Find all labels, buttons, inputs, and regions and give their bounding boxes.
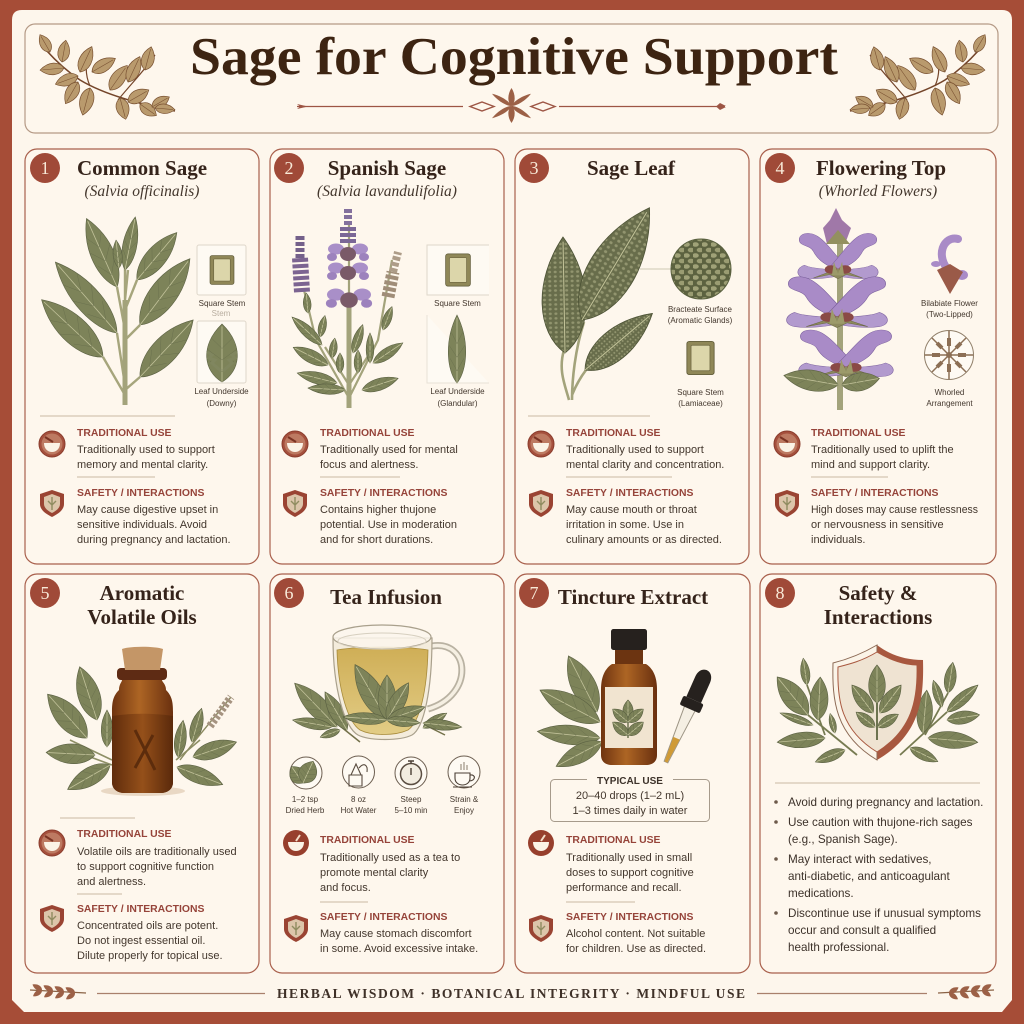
- safety: SAFETY / INTERACTIONS: [566, 912, 693, 923]
- callout: bracteate surface: (Aromatic Glands): [668, 316, 733, 325]
- panel: 1 Common Sage: [25, 149, 259, 564]
- illustration: tincture bottle and dropper: [535, 629, 717, 774]
- heading: Common Sage: [77, 156, 207, 180]
- upper right flower spike: [393, 252, 398, 272]
- illustration: whorled flower stalk: [782, 208, 893, 410]
- traditional use: focus and alertness.: [320, 459, 418, 471]
- footer tagline: HERBAL WISDOM · BOTANICAL INTEGRITY · MINDFUL USE: [277, 986, 745, 1001]
- upper left flower spike: [296, 234, 304, 258]
- step: steep timer: Steep: [401, 795, 422, 804]
- safety: May cause mouth or throat: [566, 504, 697, 516]
- icon: right botanical sprig: [850, 32, 990, 121]
- traditional use: TRADITIONAL USE: [320, 428, 415, 439]
- safety: culinary amounts or as directed.: [566, 534, 722, 546]
- traditional use: TRADITIONAL USE: [320, 835, 415, 846]
- heading: [87, 581, 197, 629]
- callout: bracteate surface: [640, 239, 733, 325]
- callout: bilabiate flower: Bilabiate Flower: [921, 299, 978, 308]
- number badge 4: 4: [776, 158, 784, 178]
- safety: during pregnancy and lactation.: [77, 534, 230, 546]
- icon: footer right sprig: [938, 982, 994, 1001]
- safety list: (e.g., Spanish Sage).: [788, 833, 898, 846]
- safety: SAFETY / INTERACTIONS: [77, 904, 204, 915]
- safety: Dilute properly for topical use.: [77, 950, 223, 962]
- callout: whorled arrangement: [924, 330, 974, 408]
- safety: [40, 904, 223, 962]
- callout: typical use: 20–40 drops (1–2 mL): [576, 790, 684, 802]
- safety: [529, 912, 706, 955]
- traditional use: Traditionally used to support: [77, 444, 215, 456]
- footer: [30, 982, 994, 1001]
- number badge 1: 1: [40, 158, 50, 178]
- step: hot water: 8 oz: [351, 795, 366, 804]
- top flower spike: [340, 225, 356, 243]
- heading: Interactions: [824, 605, 932, 629]
- safety: potential. Use in moderation: [320, 519, 457, 531]
- callout: leaf underside: Leaf Underside: [194, 387, 249, 396]
- traditional use: TRADITIONAL USE: [566, 835, 661, 846]
- traditional use: [528, 428, 724, 471]
- safety list: Avoid during pregnancy and lactation.: [788, 796, 983, 809]
- step: dried herb: [285, 757, 325, 815]
- traditional use: mind and support clarity.: [811, 459, 930, 471]
- callout: square stem: Square Stem: [434, 299, 481, 308]
- safety: or nervousness in sensitive: [811, 519, 944, 531]
- traditional use: Traditionally used to uplift the: [811, 444, 954, 456]
- heading: Spanish Sage: [328, 156, 446, 180]
- step: steep timer: 5–10 min: [395, 806, 427, 815]
- illustration: sage leaves: [541, 196, 670, 400]
- panel: 8 Safety and Interactions: [760, 574, 996, 973]
- number badge 1: [30, 153, 60, 183]
- callout: square stem: Square Stem: [199, 299, 246, 308]
- safety: High doses may cause restlessness: [811, 504, 978, 516]
- callout: square stem: Stem: [212, 309, 231, 318]
- step: hot water: Hot Water: [341, 806, 377, 815]
- callout: bilabiate flower: [921, 239, 978, 319]
- traditional use: and alertness.: [77, 876, 146, 888]
- callout: square stem: (Lamiaceae): [678, 399, 723, 408]
- callout: typical use: TYPICAL USE: [597, 776, 663, 787]
- number badge 2: 2: [284, 158, 294, 178]
- traditional use: [39, 428, 215, 471]
- number badge 6: 6: [284, 583, 294, 603]
- heading: Volatile Oils: [87, 605, 197, 629]
- safety: Concentrated oils are potent.: [77, 920, 218, 932]
- traditional use: TRADITIONAL USE: [566, 428, 661, 439]
- safety: irritation in some. Use in: [566, 519, 684, 531]
- safety: [40, 488, 230, 546]
- traditional use: performance and recall.: [566, 882, 682, 894]
- callout: leaf underside: [194, 321, 249, 408]
- heading: Aromatic: [100, 581, 184, 605]
- callout: square stem: [427, 245, 489, 308]
- safety: [775, 488, 978, 546]
- traditional use: Traditionally used to support: [566, 444, 704, 456]
- illustration: glass tea mug: [288, 625, 462, 742]
- traditional use: TRADITIONAL USE: [77, 428, 172, 439]
- traditional use: [283, 830, 460, 894]
- number badge 5: 5: [40, 583, 50, 603]
- step: dried herb: 1–2 tsp: [292, 795, 319, 804]
- safety: Contains higher thujone: [320, 504, 436, 516]
- safety: May cause digestive upset in: [77, 504, 218, 516]
- safety list: May interact with sedatives,: [788, 853, 932, 866]
- number badge 3: [519, 153, 549, 183]
- safety: Alcohol content. Not suitable: [566, 928, 705, 940]
- subtitle: (Whorled Flowers): [819, 183, 937, 200]
- callout: square stem: [197, 245, 246, 318]
- panel: 2 Spanish Sage: [270, 149, 504, 564]
- traditional use: to support cognitive function: [77, 861, 214, 873]
- panel: 7 Tincture Extract: [515, 574, 750, 973]
- safety: [283, 488, 457, 546]
- heading: Sage Leaf: [587, 156, 676, 180]
- traditional use: Volatile oils are traditionally used: [77, 846, 237, 858]
- traditional use: Traditionally used in small: [566, 852, 692, 864]
- safety list: Discontinue use if unusual symptoms: [788, 907, 981, 920]
- safety: May cause stomach discomfort: [320, 928, 472, 940]
- callout: leaf underside: [427, 315, 489, 408]
- subtitle: (Salvia lavandulifolia): [317, 183, 457, 200]
- callout: square stem: Square Stem: [677, 388, 724, 397]
- safety: in some. Avoid excessive intake.: [320, 943, 478, 955]
- safety: [529, 488, 722, 546]
- icon: footer left sprig: [30, 982, 86, 1001]
- safety: SAFETY / INTERACTIONS: [566, 488, 693, 499]
- illustration: amber oil bottle with leaves: [39, 647, 239, 797]
- lavender sprig: [210, 697, 231, 726]
- traditional use: promote mental clarity: [320, 867, 429, 879]
- title ornament: [297, 88, 726, 123]
- illustration: sage plant: [32, 214, 203, 405]
- traditional use: [774, 428, 954, 471]
- safety list: occur and consult a qualified: [788, 924, 936, 937]
- traditional use: TRADITIONAL USE: [811, 428, 906, 439]
- traditional use: and focus.: [320, 882, 371, 894]
- step: strain and enjoy: Enjoy: [454, 806, 474, 815]
- panel: 5 Aromatic Volatile Oils: [25, 574, 259, 973]
- callout: leaf underside: (Downy): [207, 399, 237, 408]
- number badge 3: 3: [530, 158, 538, 178]
- safety: SAFETY / INTERACTIONS: [811, 488, 938, 499]
- subtitle: (Salvia officinalis): [85, 183, 199, 200]
- callout: typical use: 1–3 times daily in water: [573, 805, 688, 817]
- safety: SAFETY / INTERACTIONS: [320, 488, 447, 499]
- safety: for children. Use as directed.: [566, 943, 706, 955]
- traditional use: Traditionally used as a tea to: [320, 852, 460, 864]
- step: strain and enjoy: [448, 756, 480, 815]
- safety: individuals.: [811, 534, 865, 546]
- safety: sensitive individuals. Avoid: [77, 519, 207, 531]
- panel: 3 Sage Leaf: [515, 149, 749, 564]
- callout: bracteate surface: Bracteate Surface: [668, 305, 733, 314]
- heading: Tincture Extract: [558, 585, 708, 609]
- panel: header: [25, 24, 998, 133]
- safety: SAFETY / INTERACTIONS: [77, 488, 204, 499]
- callout: typical use: [550, 775, 710, 822]
- step: dried herb: Dried Herb: [286, 806, 325, 815]
- number badge 4: [765, 153, 795, 183]
- heading: Safety &: [839, 581, 917, 605]
- number badge 7: 7: [530, 583, 538, 603]
- safety: [284, 912, 478, 955]
- step: hot water: [341, 756, 377, 815]
- panel: 4 Flowering Top: [760, 149, 996, 564]
- traditional use: TRADITIONAL USE: [77, 829, 172, 840]
- step: strain and enjoy: Strain &: [450, 795, 479, 804]
- safety list: health professional.: [788, 941, 889, 954]
- traditional use: [528, 830, 694, 894]
- heading: Flowering Top: [816, 156, 946, 180]
- number badge 5: [30, 578, 60, 608]
- safety list: Use caution with thujone-rich sages: [788, 816, 973, 829]
- illustration: Spanish sage plant: [288, 208, 406, 408]
- right flower spike: [388, 272, 393, 297]
- top flower tip: [344, 208, 352, 225]
- callout: leaf underside: Leaf Underside: [430, 387, 485, 396]
- title: Sage for Cognitive Support: [190, 28, 838, 86]
- callout: bilabiate flower: (Two-Lipped): [926, 310, 973, 319]
- left flower spike: [300, 258, 302, 292]
- traditional use: mental clarity and concentration.: [566, 459, 724, 471]
- panel: 6 Tea Infusion: [270, 574, 504, 973]
- icon: left botanical sprig: [35, 32, 175, 121]
- callout: leaf underside: (Glandular): [437, 399, 478, 408]
- number badge 2: [274, 153, 304, 183]
- traditional use: memory and mental clarity.: [77, 459, 208, 471]
- heading: [824, 581, 932, 629]
- preparation step icons: [285, 756, 480, 815]
- safety: Do not ingest essential oil.: [77, 935, 205, 947]
- number badge 7: [519, 578, 549, 608]
- traditional use: Traditionally used for mental: [320, 444, 458, 456]
- callout: square stem: [677, 341, 724, 408]
- number badge 8: 8: [776, 583, 784, 603]
- heading: Tea Infusion: [330, 585, 442, 609]
- safety list: medications.: [788, 887, 854, 900]
- callout: whorled arrangement: Whorled: [935, 388, 964, 397]
- traditional use: [39, 829, 237, 888]
- traditional use: [282, 428, 458, 471]
- safety: and for short durations.: [320, 534, 433, 546]
- safety list: [774, 796, 983, 954]
- step: steep timer: [395, 757, 427, 815]
- illustration: shield with sage leaves: [769, 645, 982, 767]
- number badge 6: [274, 578, 304, 608]
- number badge 8: [765, 578, 795, 608]
- traditional use: doses to support cognitive: [566, 867, 694, 879]
- callout: whorled arrangement: Arrangement: [926, 399, 973, 408]
- safety list: anti-diabetic, and anticoagulant: [788, 870, 951, 883]
- safety: SAFETY / INTERACTIONS: [320, 912, 447, 923]
